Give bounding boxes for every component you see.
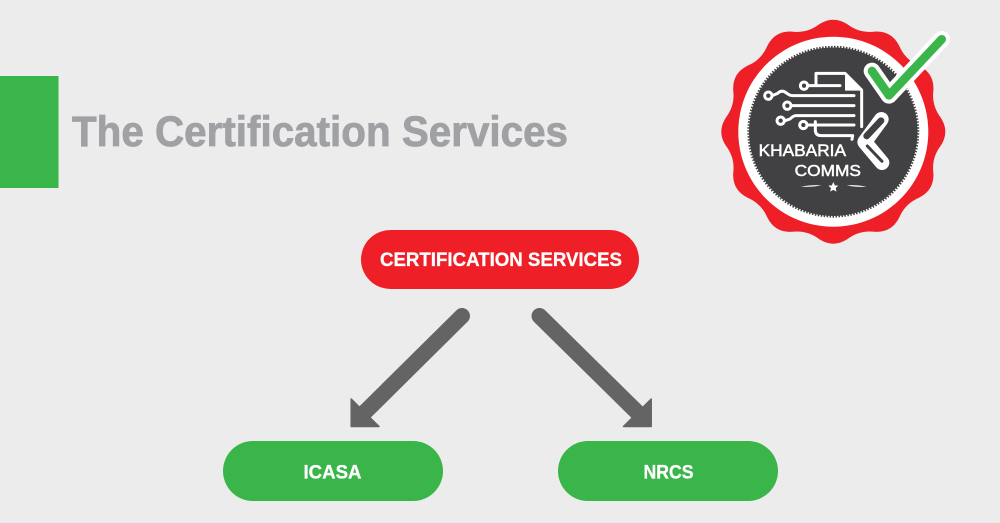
- node: ICASA: [223, 441, 443, 501]
- node: certification services: CERTIFICATION SERVICES: [380, 249, 622, 271]
- green accent block: [0, 76, 58, 188]
- logo text: KHABARIA: KHABARIA: [759, 141, 847, 160]
- icon: star and flourishes: [801, 182, 867, 192]
- icon: circuit document: [765, 73, 862, 139]
- badge: white ring: [738, 37, 928, 227]
- title: The Certification Services: [72, 108, 568, 156]
- logo text: COMMS: COMMS: [795, 163, 861, 180]
- icon: K monogram: [865, 119, 882, 163]
- arrow: to ICASA: [351, 316, 462, 426]
- node: ICASA: ICASA: [304, 461, 362, 483]
- icon: green check mark: [872, 39, 942, 95]
- badge: red scalloped seal: [721, 20, 945, 244]
- arrow: to NRCS: [540, 316, 651, 426]
- node: NRCS: NRCS: [644, 461, 694, 483]
- node: NRCS: [558, 441, 778, 501]
- node: certification services: [361, 230, 639, 289]
- badge: dark disc: [747, 46, 919, 218]
- logo badge: Khabaria Comms: [721, 20, 945, 244]
